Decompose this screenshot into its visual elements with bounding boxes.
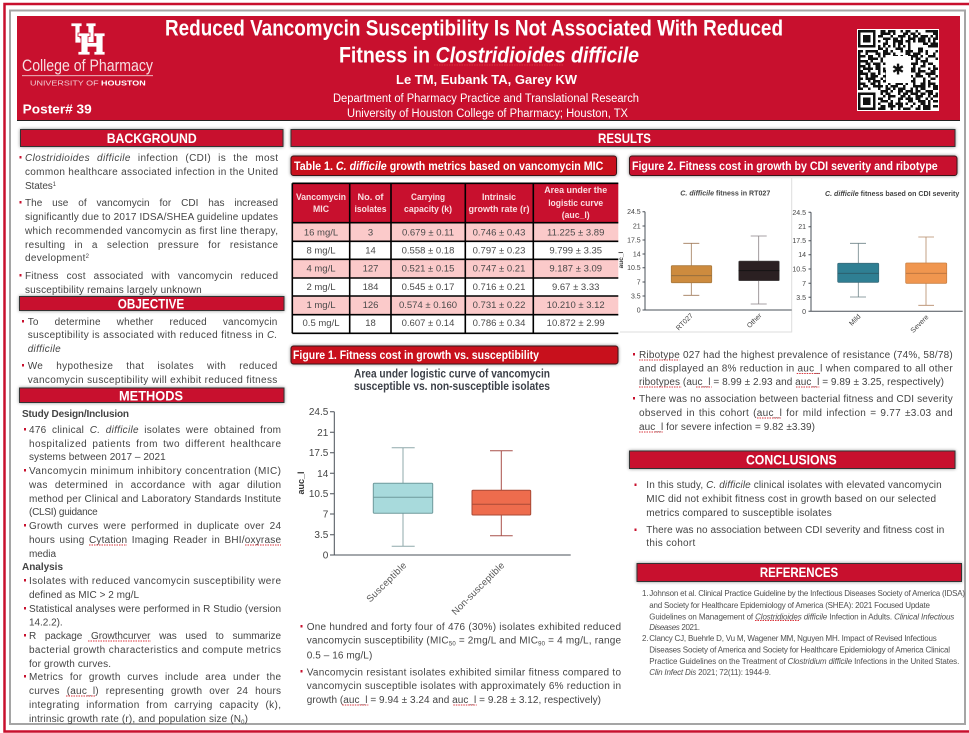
y axis: 24.5 [309, 407, 329, 418]
table body rows: 11.225 ± 3.89 [547, 227, 604, 238]
text block: methods: Growth curves were performed in duplicate over 24 [29, 521, 281, 532]
text block: background: common healthcare associated infection in the United [25, 167, 278, 178]
table body rows: 1 mg/L [306, 300, 336, 311]
text block: references: Clancy CJ, Buehrle D, Vu M, Wagener MM, Nguyen MH. Impact of Revised Infectious [649, 634, 937, 643]
y axis: 3.5 [314, 530, 329, 541]
table header row: Carrying [411, 192, 445, 202]
text block: methods: (CLSI) guidance [29, 507, 98, 518]
table body rows: 0.746 ± 0.43 [473, 227, 525, 238]
text block: objective: vancomycin susceptibility will exhibit reduced fitness [28, 375, 277, 386]
subheading: analysis: Analysis [22, 562, 63, 573]
table: growth metrics by MIC [292, 183, 618, 333]
text block: methods: for growth curves. [29, 659, 111, 670]
table body rows: 0.607 ± 0.14 [402, 318, 454, 329]
text block: objective [22, 317, 277, 386]
x axis labels: Non-susceptible [450, 560, 507, 618]
text block: references: Diseases 2021. [649, 623, 700, 632]
text block: objective: difficile [28, 344, 61, 355]
table header row: capacity (k) [404, 204, 452, 214]
heading: background: BACKGROUND [107, 130, 197, 146]
text block: methods [22, 409, 281, 726]
table body rows: 0.574 ± 0.160 [399, 300, 457, 311]
heading: figure 2 [630, 156, 957, 176]
box: RT027 [671, 243, 712, 295]
affiliation: University of Houston College of Pharmacy; Houston, TX [347, 108, 628, 120]
chart: figure 2 fitness by CDI severity: 21 [798, 224, 806, 231]
text block: results susceptibility: growth (auc_l = 9.94 ± 3.24 and auc_l = 9.28 ± 3.12, respectively) [307, 695, 601, 706]
table body rows: 9.799 ± 3.35 [549, 245, 602, 256]
table body rows: 0.731 ± 0.22 [473, 300, 525, 311]
text block: background: States [25, 181, 53, 192]
icon: interlocked UH mark [71, 23, 105, 55]
logo: University of Houston College of Pharmacy: College of Pharmacy [22, 56, 153, 75]
text block: results susceptibility: 0.5 – 16 mg/L) [307, 650, 372, 662]
text block: conclusions: this cohort [646, 538, 696, 549]
y axis: auc_l [296, 471, 306, 495]
text block: conclusions: metrics compared to susceptible isolates [646, 508, 832, 519]
heading: background [20, 130, 283, 146]
y axis: 7 [323, 510, 329, 520]
header banner [17, 16, 960, 120]
chart: figure 2 fitness in RT027: 14 [633, 252, 641, 258]
text block: results susceptibility: vancomycin susceptibility (MIC [307, 636, 449, 646]
text block: methods: integrating information from carrying capacity (k), [29, 700, 281, 711]
title: Reduced Vancomycin Susceptibility Is Not Associated With Reduced [165, 16, 783, 40]
text block: results ribotype and severity: ribotypes (auc_l = 8.99 ± 2.93 and auc_l = 9.89 ± 3.25, respectively) [639, 377, 944, 388]
text block: methods: hospitalized patients from two different healthcare [29, 439, 281, 450]
table body rows: 0.558 ± 0.18 [402, 245, 454, 256]
table body rows: 0.679 ± 0.11 [402, 227, 454, 238]
heading: conclusions [630, 451, 955, 468]
table body rows: 10.210 ± 3.12 [547, 300, 605, 311]
table body rows: 0.786 ± 0.34 [473, 318, 525, 329]
y axis: 17.5 [309, 448, 329, 459]
text block: references: Johnson et al. Clinical Practice Guideline by the Infectious Diseases Society of America (IDSA) [649, 589, 965, 598]
heading: table 1 [291, 156, 616, 176]
table header row: No. of [358, 192, 385, 202]
chart: figure 2 fitness in RT027: RT027 [675, 312, 695, 332]
text block: results susceptibility: Vancomycin resistant isolates exhibited similar fitness compared to [307, 668, 621, 678]
table body rows: 0.521 ± 0.15 [402, 263, 454, 274]
chart: figure 2 fitness in RT027: 0 [637, 308, 641, 314]
heading: methods [20, 388, 284, 404]
text block: references: Clin Infect Dis 2021; 72(11): 1944-9. [649, 668, 771, 677]
heading: figure 1: Figure 1. Fitness cost in growth vs. susceptibility [293, 350, 540, 362]
box: susceptible [373, 448, 433, 546]
text block: references: Diseases Society of America and Society for Healthcare Epidemiology of America Clinical [649, 646, 950, 655]
affiliation [333, 93, 639, 120]
text block: results susceptibility: = 2mg/L and MIC [456, 636, 538, 646]
chart: figure 1 box plot [296, 368, 571, 618]
text block: references: and Society for Healthcare Epidemiology of America (SHEA): 2021 Focused Update [649, 601, 931, 610]
text block: objective: To determine whether reduced vancomycin [28, 317, 277, 328]
text block: background: The use of vancomycin for CDI has increased [25, 198, 278, 209]
table body rows: 3 [368, 227, 373, 238]
text block: methods: intrinsic growth rate (r), and population size (N [29, 714, 241, 725]
text block: background [20, 153, 278, 296]
y axis: 0 [323, 550, 329, 562]
table body rows: 16 mg/L [304, 227, 338, 238]
logo: University of Houston College of Pharmacy: UNIVERSITY OF HOUSTON [30, 78, 146, 88]
y axis: 14 [317, 469, 329, 480]
table body rows [303, 227, 605, 329]
chart: figure 2 fitness in RT027: 17.5 [627, 238, 641, 244]
logo: University of Houston College of Pharmacy [22, 23, 153, 88]
text block: results ribotype and severity: and displayed an 8% reduction in auc_l when compared to all other [639, 364, 953, 374]
text block: objective: susceptibility is associated with reduced fitness in C. [28, 330, 277, 341]
box: severe [906, 237, 947, 305]
y axis [296, 407, 571, 562]
chart: figure 2 fitness in RT027: 24.5 [627, 209, 641, 216]
table body rows: 18 [365, 318, 376, 329]
subheading: study design: Study Design/Inclusion [22, 409, 129, 420]
heading: references: REFERENCES [760, 564, 838, 580]
table body rows: 4 mg/L [306, 263, 336, 274]
heading: table 1: Table 1. C. difficile growth metrics based on vancomycin MIC [294, 161, 603, 173]
text block: results susceptibility: = 4 mg/L, range [545, 636, 621, 646]
table body rows: 0.747 ± 0.21 [473, 263, 525, 274]
text block: methods: Statistical analyses were performed in R Studio (version [29, 604, 281, 615]
chart: figure 2 fitness in RT027: Other [746, 312, 764, 330]
table body rows: 0.5 mg/L [303, 318, 339, 329]
text block: methods: 14.2.2). [29, 618, 63, 628]
QR code [857, 29, 939, 111]
text block: background: susceptibility remains largely unknown [25, 285, 202, 296]
x axis labels: Susceptible [365, 560, 409, 605]
table header row [296, 185, 607, 220]
chart: figure 2 fitness in RT027: auc_l [618, 251, 625, 268]
table body rows: 0.797 ± 0.23 [473, 245, 525, 256]
text block: conclusions: In this study, C. difficile clinical isolates with elevated vancomycin [646, 480, 942, 491]
chart: figure 2 fitness in RT027: 7 [637, 280, 641, 286]
chart: figure 2 fitness in RT027: 21 [633, 224, 641, 230]
text block: references: 2. [642, 634, 649, 643]
chart: figure 2 fitness by CDI severity: Severe [910, 314, 930, 335]
text block: methods: Vancomycin minimum inhibitory concentration (MIC) [29, 466, 281, 477]
text block: background: development [25, 253, 85, 264]
chart: figure 2 fitness by CDI severity: C. difficile fitness based on CDI severity [825, 191, 959, 198]
text block: results ribotype and severity: Ribotype 027 had the highest prevalence of resistance (74%, 58/78) [639, 350, 953, 361]
authors: Le TM, Eubank TA, Garey KW [396, 72, 578, 87]
chart title: susceptible vs. non-susceptible isolates [354, 381, 550, 393]
text block: methods: curves (auc_l) representing growth over 24 hours [29, 686, 281, 697]
box: non-susceptible [472, 451, 531, 536]
text block: objective: We hypothesize that isolates with reduced [28, 361, 277, 372]
table header row: Vancomycin [296, 192, 346, 202]
chart: figure 2 fitness in RT027: 3.5 [631, 294, 641, 300]
text block: references: Guidelines on Management of Clostridioides difficile Infection in Adults. Clinical Infectious [649, 613, 954, 622]
text block: background: Clostridioides difficile infection (CDI) is the most [25, 153, 278, 164]
chart: figure 2 fitness in RT027 [618, 178, 792, 332]
heading: figure 1 [291, 346, 618, 364]
text block: methods: bacterial growth characteristics and compute metrics [29, 645, 281, 656]
text block: background: 2 [86, 254, 90, 260]
table body rows: 14 [365, 245, 376, 256]
heading: figure 2: Figure 2. Fitness cost in growth by CDI severity and ribotype [632, 161, 938, 173]
chart: figure 2 fitness by CDI severity: 10.5 [792, 266, 806, 274]
poster number: Poster# 39 [23, 102, 92, 116]
title: Fitness in Clostridioides difficile [339, 42, 639, 68]
table header row: MIC [313, 204, 329, 214]
table header row: growth rate (r) [468, 204, 530, 214]
box: other [739, 236, 779, 304]
heading: references [637, 564, 962, 582]
table header row: isolates [354, 204, 386, 214]
box: mild [838, 243, 879, 297]
text block: methods: ) [245, 714, 248, 725]
heading: objective: OBJECTIVE [118, 296, 184, 312]
text block: results susceptibility: vancomycin susceptible isolates with approximately 6% reduction in [307, 681, 621, 692]
title [165, 16, 783, 68]
heading: results: RESULTS [598, 130, 651, 146]
text block: results ribotype and severity: There was no association between bacterial fitness and CDI severity [639, 394, 953, 405]
text block: background: 1 [53, 182, 57, 188]
chart: figure 2 fitness by CDI severity: 14 [798, 252, 806, 259]
text block: methods: Metrics for growth curves include area under the [29, 672, 281, 683]
table body rows: 9.67 ± 3.33 [552, 282, 599, 293]
text block: conclusions [634, 480, 944, 549]
chart: figure 2 fitness by CDI severity: 0 [802, 309, 806, 316]
y axis: 10.5 [309, 489, 329, 500]
table body rows: 126 [363, 300, 378, 311]
text block: methods: R package Growthcurver was used to summarize [29, 631, 281, 642]
text block: conclusions: There was no association between CDI severity and fitness cost in [646, 525, 944, 536]
table header row: Area under the [544, 185, 607, 195]
table body rows: 184 [363, 282, 378, 293]
chart title: Area under logistic curve of vancomycin [354, 368, 550, 380]
text block: methods: defined as MIC > 2 mg/L [29, 590, 139, 601]
heading: objective [20, 296, 284, 312]
text block: conclusions: MIC did not exhibit fitness cost in growth based on our selected [646, 494, 936, 505]
heading: methods: METHODS [119, 388, 183, 404]
text block: results susceptibility: 50 [449, 642, 456, 648]
x axis labels [365, 560, 507, 618]
text block: references: Practice Guidelines on the Treatment of Clostridium difficile Infections in the United States. [649, 657, 959, 666]
chart: figure 2 fitness by CDI severity: 3.5 [796, 295, 806, 302]
text block: methods: method per Clinical and Laboratory Standards Institute [29, 494, 281, 505]
text block: methods: media [29, 549, 56, 560]
chart: figure 2 fitness by CDI severity: Mild [848, 313, 862, 327]
table body rows: 8 mg/L [306, 245, 336, 256]
text block: results ribotype and severity [633, 350, 953, 433]
chart: figure 2 fitness by CDI severity: 17.5 [792, 238, 806, 245]
text block: background: Fitness cost associated with vancomycin reduced [25, 271, 278, 282]
chart: figure 2 fitness by CDI severity [792, 191, 963, 335]
text block: results susceptibility [300, 622, 621, 706]
affiliation: Department of Pharmacy Practice and Translational Research [333, 93, 639, 105]
table body rows: 10.872 ± 2.99 [547, 318, 605, 329]
text block: methods: 0 [241, 720, 245, 726]
text block: references: 1. [642, 589, 649, 598]
table body rows: 9.187 ± 3.09 [549, 263, 602, 274]
table header row: (auc_l) [562, 210, 590, 220]
QR code: ✱ [892, 60, 904, 78]
text block: methods: Isolates with reduced vancomycin susceptibility were [29, 576, 281, 587]
table body rows: 0.545 ± 0.17 [402, 282, 454, 293]
chart: figure 2 fitness by CDI severity: 7 [802, 281, 806, 288]
text block: results ribotype and severity: auc_l for severe infection = 9.82 ±3.39) [639, 422, 815, 433]
chart: figure 2 fitness in RT027: 10.5 [627, 265, 641, 272]
text block: results susceptibility: 90 [538, 642, 546, 648]
text block: references [642, 589, 965, 677]
text block: results susceptibility: One hundred and forty four of 476 (30%) isolates exhibited reduced [307, 622, 621, 633]
table body rows: 2 mg/L [306, 282, 336, 293]
text block: background: which recommended vancomycin as first line therapy, [24, 226, 278, 237]
text block: methods: 476 clinical C. difficile isolates were obtained from [29, 425, 281, 436]
text block: background: resulting in a selection pressure for resistance [25, 240, 278, 251]
text block: methods: systems between 2017 – 2021 [29, 452, 166, 463]
chart: figure 2 fitness by CDI severity: 24.5 [792, 210, 806, 217]
text block: methods: hours using Cytation Imaging Reader in BHI/oxyrase [29, 535, 281, 546]
heading: conclusions: CONCLUSIONS [746, 452, 837, 468]
text block: background: significantly due to 2017 IDSA/SHEA guideline updates [25, 212, 278, 223]
chart title [354, 368, 550, 393]
table body rows: 0.716 ± 0.21 [473, 282, 525, 293]
y axis: 21 [317, 428, 329, 439]
table header row: logistic curve [548, 198, 603, 208]
text block: methods: was determined in accordance with agar dilution [28, 480, 281, 491]
table header row: Intrinsic [482, 192, 516, 202]
heading: results [291, 130, 955, 146]
table body rows: 127 [363, 263, 378, 274]
text block: results ribotype and severity: observed in this cohort (auc_l for mild infection = 9.77 ±3.03 and [639, 408, 953, 419]
chart: figure 2 fitness in RT027: C. difficile fitness in RT027 [680, 190, 770, 197]
